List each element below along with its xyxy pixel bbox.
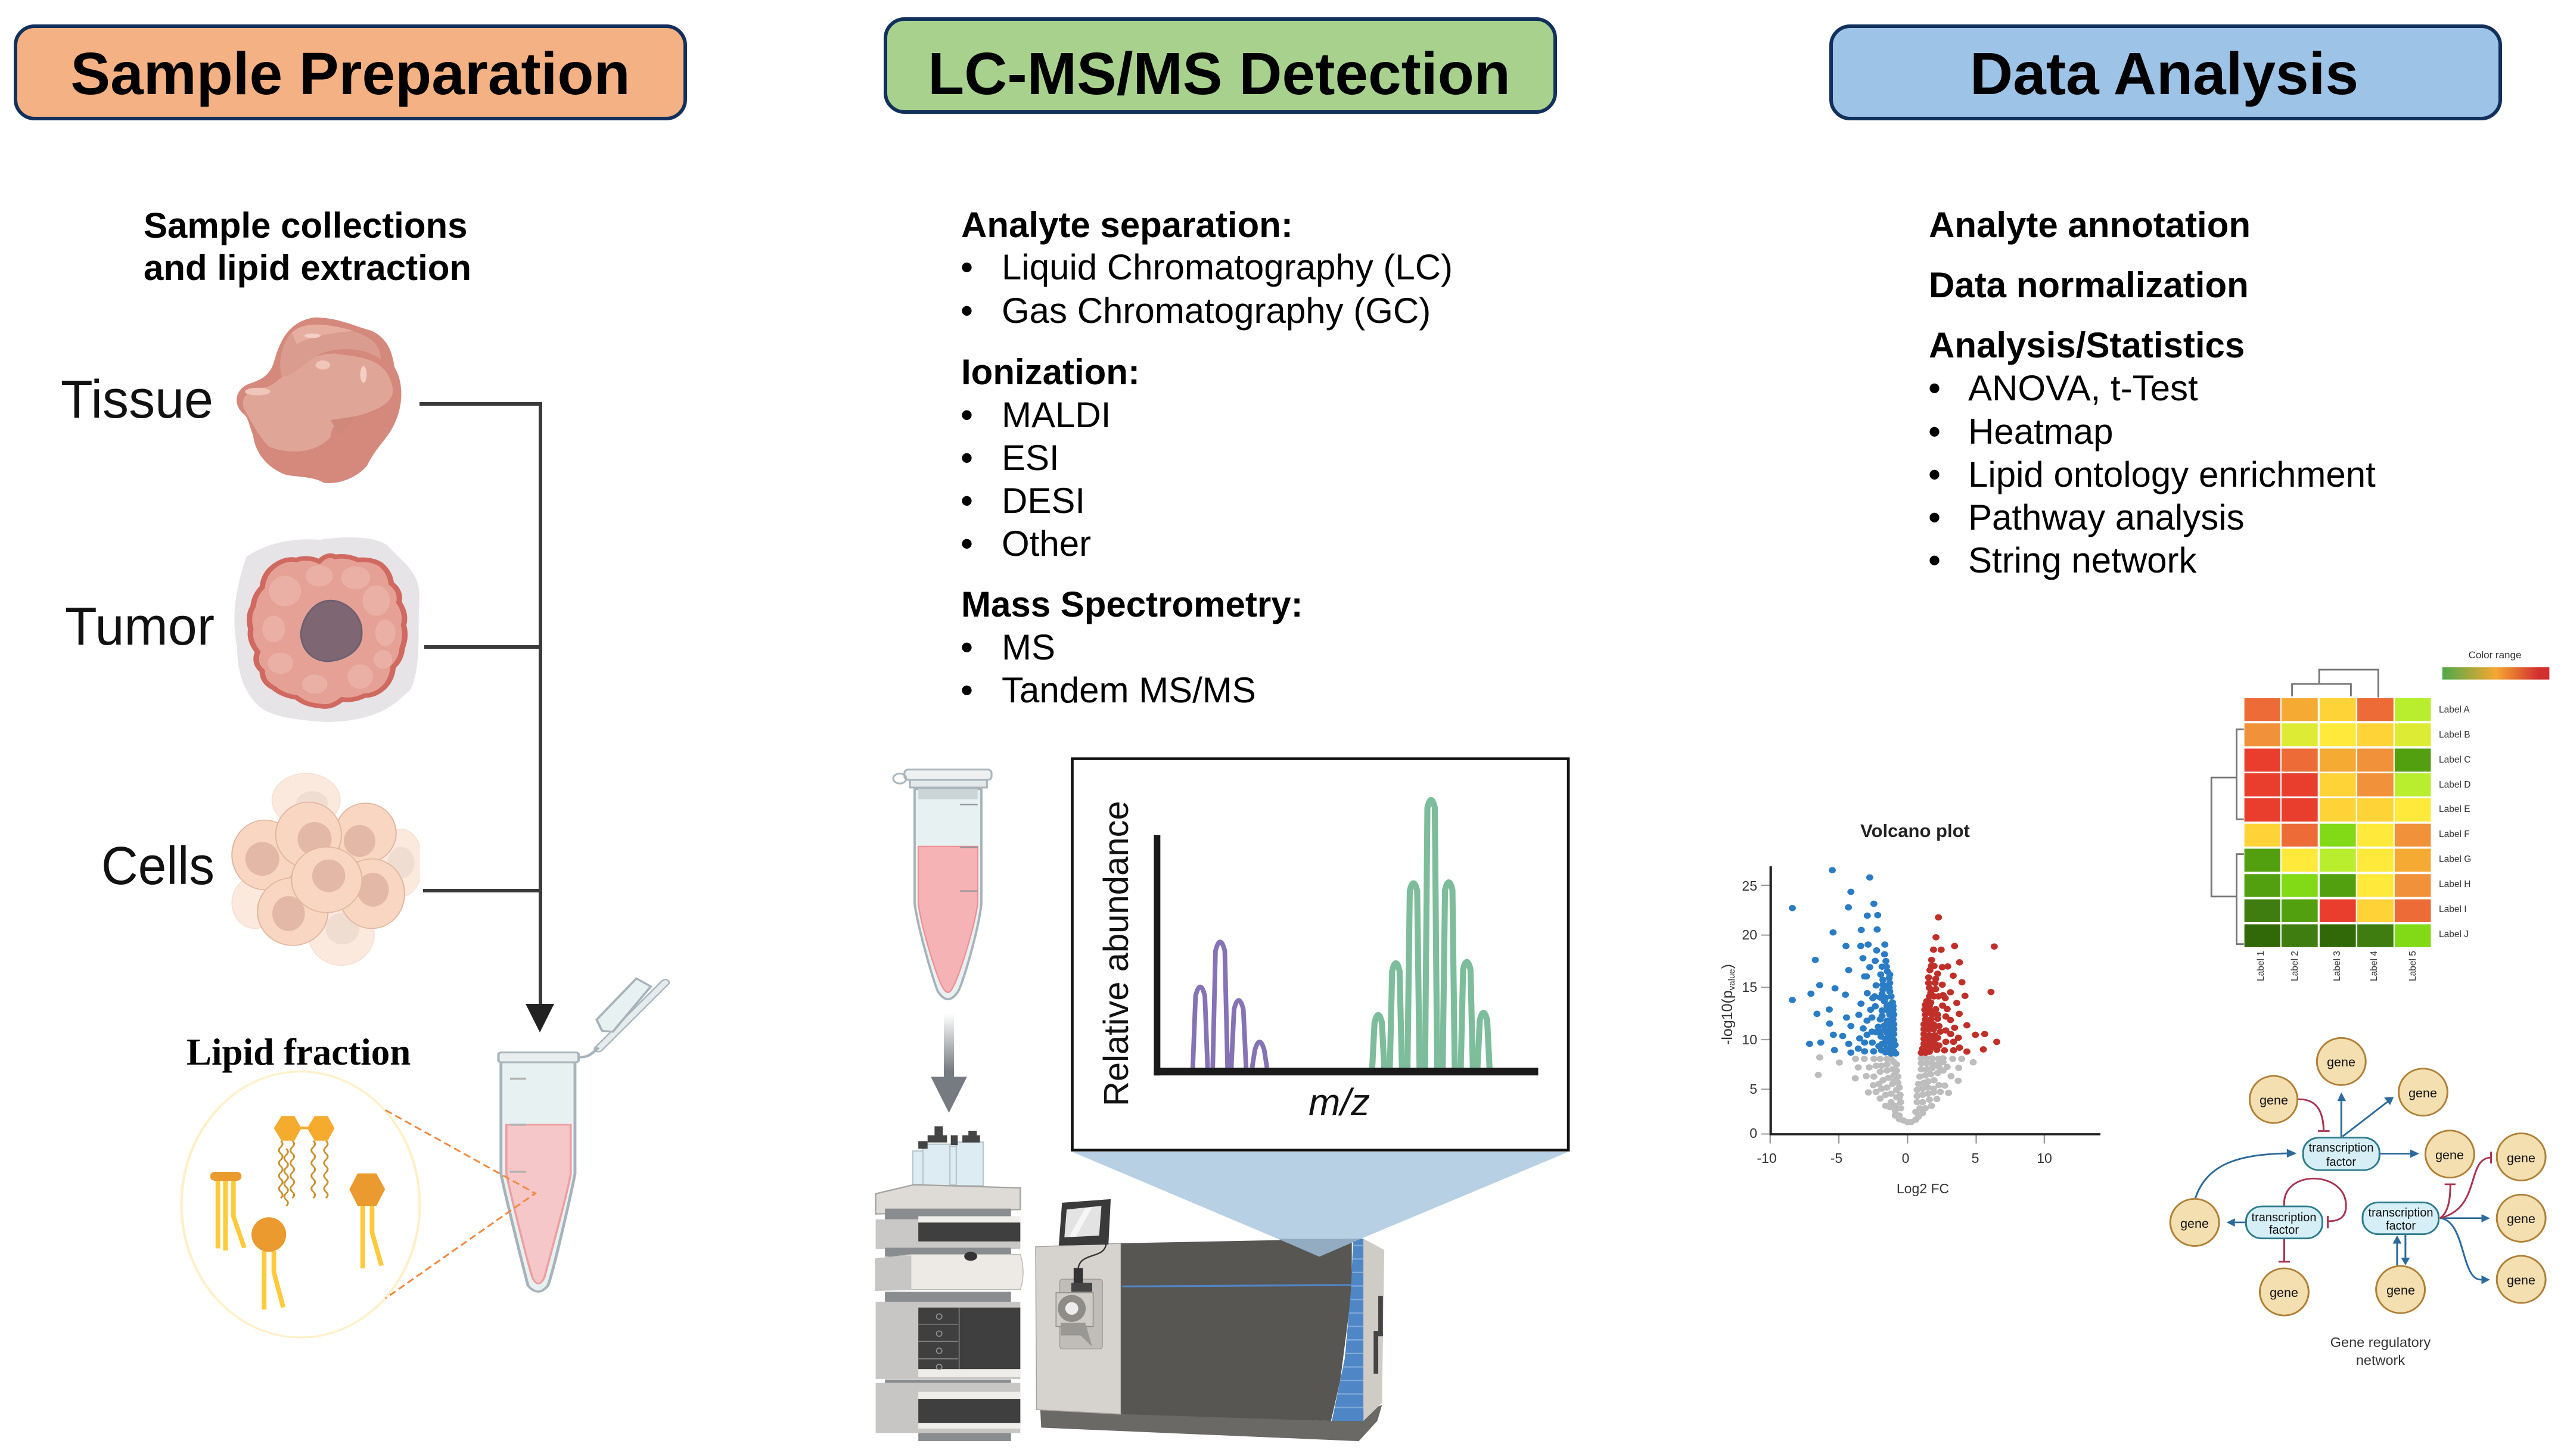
illustration: LC instrument stack (876, 1127, 1023, 1441)
chart: volcano plot: -log10(p (1719, 990, 1736, 1045)
text: mass spectrometry: Mass Spectrometry: (961, 584, 1303, 624)
text: analysis steps: • (1928, 368, 1941, 408)
chart: volcano plot: 20 (1742, 927, 1757, 942)
chart: gene regulatory network: gene (2507, 1212, 2535, 1226)
chart: volcano plot: 5 (1972, 1150, 1979, 1166)
chart: heatmap: Label 3 (2332, 951, 2342, 981)
icon: cells (232, 773, 423, 965)
text: analyte separation: Analyte separation: (961, 205, 1293, 245)
chart: heatmap: Label G (2439, 854, 2471, 864)
text: mass spectrometry: Tandem MS/MS (1002, 670, 1256, 710)
heading: Data Analysis: Data Analysis (1970, 41, 2358, 107)
text: ionization: • (961, 481, 973, 521)
chart: volcano plot: Log2 FC (1897, 1181, 1949, 1196)
icon: sample tube with open lid (499, 978, 665, 1292)
text: mass spectrometry: • (961, 670, 973, 710)
text: ionization: Other (1002, 524, 1091, 564)
chart: heatmap: Label 1 (2256, 951, 2266, 981)
chart: heatmap: Label C (2439, 755, 2470, 765)
chart: volcano plot: 5 (1749, 1081, 1757, 1097)
text: sample collections and lipid extraction: and lipid extraction (144, 248, 471, 288)
text: analyte separation (961, 205, 1453, 331)
text: analyte separation: • (961, 291, 973, 331)
text: analyte separation: • (961, 247, 973, 287)
text: sample collections and lipid extraction: Sample collections (144, 206, 468, 245)
chart: volcano plot: ) (1719, 964, 1736, 969)
heading: Sample Preparation: Sample Preparation (70, 41, 630, 107)
text: ionization: MALDI (1002, 395, 1111, 435)
label: Cells: Cells (101, 836, 215, 896)
chart: heatmap: Label A (2439, 705, 2470, 715)
text: ionization: DESI (1002, 481, 1085, 521)
chart: heatmap (2211, 649, 2549, 981)
callout: dashed zoom lines (386, 1110, 535, 1298)
chart: gene regulatory network: gene (2270, 1286, 2298, 1300)
chart: volcano plot: Volcano plot (1860, 820, 1970, 841)
text: analysis steps: Pathway analysis (1968, 497, 2245, 537)
text: sample collections and lipid extraction (144, 206, 471, 288)
label: Tissue: Tissue (61, 370, 213, 430)
arrow: vial to instrument (931, 1014, 967, 1113)
text: analysis steps: Data normalization (1929, 265, 2249, 305)
chart: heatmap: Label H (2439, 879, 2470, 889)
text: analysis steps: • (1928, 412, 1941, 452)
text: analyte separation: Liquid Chromatography (LC) (1002, 247, 1453, 287)
chart: heatmap: Label F (2439, 829, 2470, 839)
chart: gene regulatory network: network (2356, 1352, 2405, 1368)
text: analysis steps (1928, 205, 2376, 580)
chart: volcano plot: 10 (1742, 1032, 1757, 1047)
chart: gene regulatory network: factor (2386, 1219, 2416, 1233)
chart: gene regulatory network: transcription (2252, 1211, 2316, 1224)
heading: LC-MS/MS Detection: LC-MS/MS Detection (928, 41, 1511, 107)
icon: tumor (234, 537, 419, 722)
label: Tumor: Tumor (65, 597, 215, 657)
chart: heatmap: Label B (2439, 730, 2470, 740)
heading: Sample Preparation (15, 26, 685, 119)
chart: volcano plot: 0 (1749, 1125, 1757, 1141)
text: analysis steps: Lipid ontology enrichment (1968, 455, 2376, 494)
chart: mass spectrum: m/z (1309, 1081, 1370, 1124)
chart: gene regulatory network: gene (2386, 1283, 2415, 1298)
chart: volcano plot: 0 (1902, 1150, 1909, 1166)
panel: sample preparation (15, 26, 685, 1337)
chart: gene regulatory network: factor (2326, 1156, 2356, 1169)
text: ionization: • (961, 395, 973, 435)
icon: sample vial (893, 770, 992, 999)
chart: volcano plot: 10 (2037, 1150, 2052, 1166)
chart: mass spectrum: Relative abundance (1097, 801, 1136, 1106)
chart: volcano plot: 15 (1742, 979, 1757, 995)
text: analysis steps: • (1928, 540, 1941, 580)
chart: heatmap: Label D (2439, 780, 2470, 790)
label: Lipid fraction: Lipid fraction (187, 1031, 411, 1073)
chart: heatmap: Color range (2469, 649, 2521, 661)
text: mass spectrometry (961, 584, 1303, 710)
chart: gene regulatory network: Gene regulatory (2330, 1334, 2431, 1350)
chart: heatmap: Label 5 (2408, 951, 2418, 981)
text: mass spectrometry: MS (1002, 627, 1055, 667)
chart: volcano plot: 25 (1742, 878, 1757, 894)
panel: data analysis (1719, 26, 2549, 1368)
chart: volcano plot: -10 (1757, 1150, 1777, 1166)
chart: heatmap: Label J (2439, 929, 2469, 939)
text: mass spectrometry: • (961, 627, 973, 667)
chart: gene regulatory network: gene (2507, 1151, 2535, 1165)
text: ionization (961, 352, 1140, 564)
chart: heatmap: Label I (2439, 904, 2467, 914)
text: analysis steps: ANOVA, t-Test (1968, 368, 2198, 408)
chart: gene regulatory network: gene (2327, 1055, 2355, 1069)
text: analysis steps: String network (1968, 540, 2197, 580)
chart: volcano plot: value (1727, 969, 1737, 990)
chart: gene regulatory network: gene (2408, 1086, 2437, 1100)
chart: gene regulatory network: factor (2269, 1224, 2299, 1237)
chart: gene regulatory network (2170, 1038, 2546, 1368)
text: analysis steps: • (1928, 497, 1941, 537)
callout: blue projection to spectrum (1072, 1152, 1568, 1256)
text: analyte separation: Gas Chromatography (GC) (1002, 291, 1431, 331)
text: ionization: Ionization: (961, 352, 1140, 392)
text: analysis steps: Heatmap (1968, 412, 2113, 452)
illustration: lipid fraction circle (182, 1072, 419, 1337)
chart: heatmap: Label 2 (2290, 951, 2300, 981)
chart: heatmap: Label 4 (2369, 951, 2379, 981)
chart: heatmap: Label E (2439, 804, 2470, 814)
chart: gene regulatory network: transcription (2309, 1141, 2373, 1155)
text: ionization: • (961, 438, 973, 478)
text: ionization: • (961, 524, 973, 564)
text: analysis steps: • (1928, 455, 1941, 494)
panel: LC-MS/MS detection (876, 19, 1568, 1441)
chart: gene regulatory network: gene (2435, 1148, 2464, 1162)
heading: Data Analysis (1831, 26, 2500, 119)
text: analysis steps: Analyte annotation (1929, 205, 2251, 245)
chart: gene regulatory network: gene (2260, 1093, 2288, 1107)
chart: gene regulatory network: gene (2180, 1217, 2209, 1231)
chart: gene regulatory network: transcription (2369, 1206, 2433, 1219)
chart: volcano plot: -5 (1830, 1150, 1842, 1166)
text: analysis steps: Analysis/Statistics (1929, 325, 2245, 365)
illustration: mass spectrometer (1036, 1199, 1384, 1441)
chart: volcano plot (1719, 820, 2100, 1196)
heading: LC-MS/MS Detection (885, 19, 1555, 112)
arrow: samples into tube (419, 402, 554, 1032)
chart: gene regulatory network: gene (2507, 1273, 2535, 1287)
text: ionization: ESI (1002, 438, 1059, 478)
chart: mass spectrum (1072, 759, 1568, 1150)
icon: tissue (237, 318, 401, 483)
